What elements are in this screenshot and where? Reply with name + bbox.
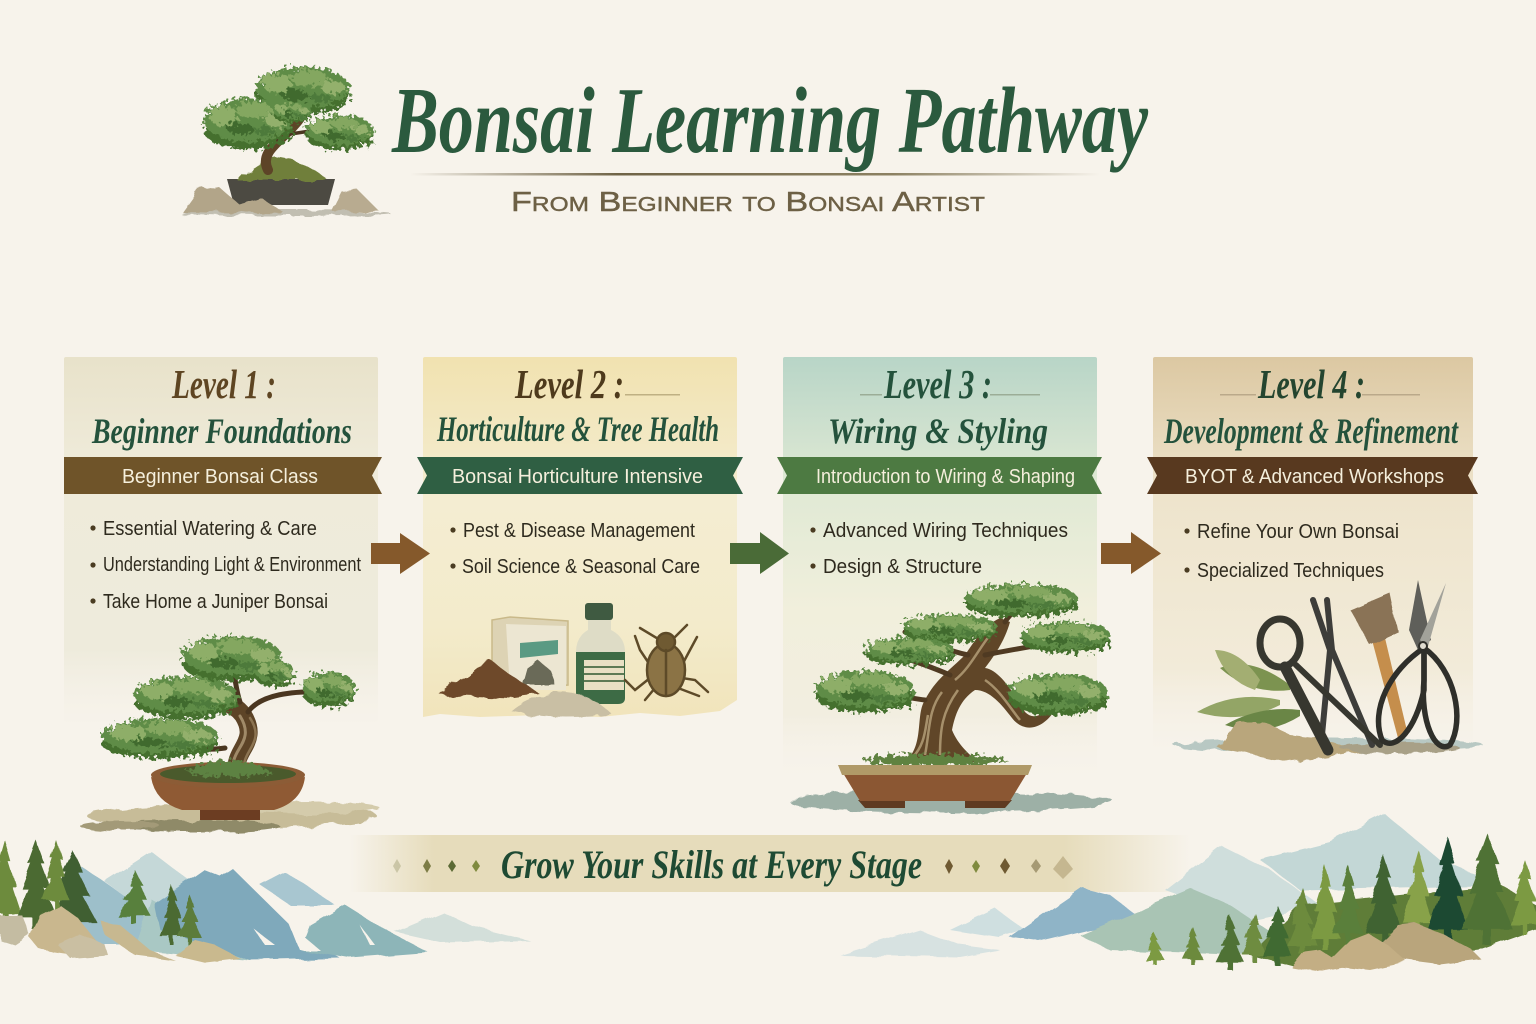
banner text: Grow Your Skills at Every Stage [501,842,922,887]
foliage [101,636,355,759]
panel: level 3 [777,357,1102,777]
level 4 bullet list [1184,521,1399,582]
conifers [0,840,202,945]
logo: bonsai on rocks [180,67,390,216]
level 3 ribbon [777,457,1102,494]
level 2 heading: Horticulture & Tree Health [436,409,719,449]
level 3 label: Level 3 : [883,361,992,407]
trunk and branches [860,598,1090,762]
foliage [816,584,1111,716]
level 2 bullet list: Pest & Disease Management [463,520,695,542]
level 3 ribbon: Introduction to Wiring & Shaping [816,466,1075,488]
arrow 2 [730,532,789,574]
ground [80,802,380,832]
pruning shears [1378,580,1457,747]
level 2 bullet list: Soil Science & Seasonal Care [462,556,700,578]
pot [151,760,305,820]
wire cutter pliers [1313,600,1372,745]
rocks [0,905,240,962]
banner [350,835,1190,892]
icon: rock [512,693,612,718]
shadow [790,791,1114,813]
level 1 heading: Beginner Foundations [91,411,352,451]
brush [1350,593,1408,738]
panel: level 2 [417,357,743,718]
mountains [60,852,530,960]
level 1 bullet list: Take Home a Juniper Bonsai [103,591,328,613]
panel: level 4 [1147,357,1478,747]
level 1 label: Level 1 : [171,361,276,407]
mountains [840,814,1500,957]
level 4 bullet list: Specialized Techniques [1197,560,1384,582]
panel: level 1 [64,357,382,722]
right mountain scene [840,814,1536,972]
level 4 bullet list: Refine Your Own Bonsai [1197,521,1399,543]
title: Bonsai Learning Pathway [391,69,1148,173]
arrow 1 [371,533,430,574]
level 3 bullet list: Design & Structure [823,556,982,578]
pot [838,765,1032,808]
title rule [410,173,1100,176]
level 1 ribbon [64,457,382,494]
level 2 label: Level 2 : [514,361,624,407]
icon: soil pile [440,661,540,698]
trunk and branches [130,655,335,778]
icon: soil bag [492,617,568,690]
level 3 heading: Wiring & Styling [828,411,1048,451]
level 2 bullet list [450,520,700,578]
level 1 bullet list: Essential Watering & Care [103,518,317,540]
conifers [1145,833,1536,970]
illustration: level 3 bonsai [790,584,1114,813]
level 3 bullet list: Advanced Wiring Techniques [823,520,1068,542]
diamonds left [393,859,480,873]
illustration: level 1 bonsai [80,636,380,832]
concave cutter [1260,619,1380,750]
arrow 3 [1101,532,1161,574]
level 2 ribbon: Bonsai Horticulture Intensive [452,466,703,488]
level 1 bullet list: Understanding Light & Environment [103,554,361,576]
level 4 ribbon [1147,457,1478,494]
subtitle: From Beginner to Bonsai Artist [511,186,985,217]
level 3 bullet list [810,520,1068,578]
level 1 ribbon: Beginner Bonsai Class [122,466,318,488]
level 4 label: Level 4 : [1257,361,1365,407]
level 4 ribbon: BYOT & Advanced Workshops [1185,466,1444,488]
illustration: bonsai tools [1173,580,1483,762]
rocks [1292,923,1482,972]
leaves [1197,650,1300,730]
level 2 ribbon [417,457,743,494]
moss [863,754,1007,766]
level 1 bullet list [90,518,361,613]
diamonds right [945,856,1073,879]
icon: bottle [576,603,625,704]
ground and rocks [1173,722,1483,762]
icon: beetle [625,625,708,700]
left mountain scene [0,840,530,962]
